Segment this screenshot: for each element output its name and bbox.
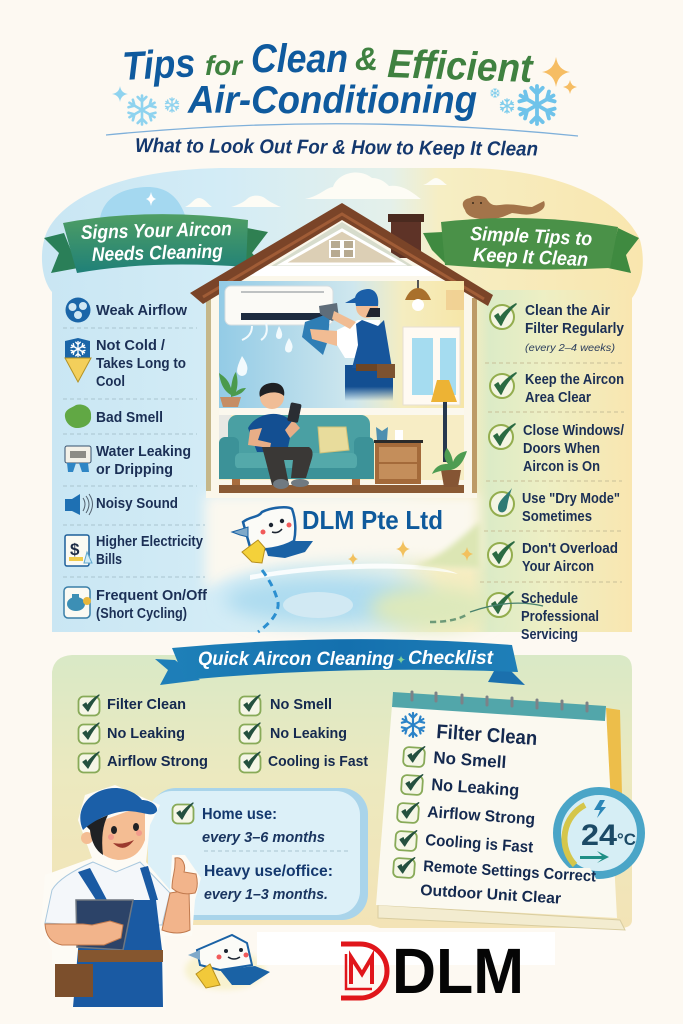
logo: DLM [341,935,524,1007]
item: no smell: No Smell [270,696,332,713]
item: do not overload: Don't Overload [522,541,618,557]
overalls bib [352,320,392,368]
item: do not overload: Your Aircon [522,559,594,575]
item: not cold [65,338,186,390]
badge: 24 degrees [557,791,641,882]
side table [374,427,423,484]
ribbon: quick aircon cleaning checklist: Checklist [408,647,494,669]
item: frequent on off: Frequent On/Off [96,588,207,604]
ribbon: signs your aircon needs cleaning: Needs Cleaning [92,241,223,266]
item: filter clean: Filter Clean [107,696,186,713]
list: signs your aircon needs cleaning [63,298,207,622]
icon: leaking unit [65,446,91,472]
title: for [205,50,244,81]
title: Efficient [387,42,535,91]
sofa [219,415,374,485]
logo mark [341,944,387,998]
floor [219,485,464,493]
notebook checklist [376,692,641,930]
ribbon: signs your aircon needs cleaning [44,214,268,273]
company name: DLM Pte Ltd [302,505,443,535]
list: simple tips [470,303,624,643]
item: water leaking: or Dripping [96,462,173,478]
item: airflow strong [78,752,208,772]
notebook text [420,721,596,908]
right arm [162,890,190,933]
icon: snow cone [65,338,91,382]
item: keep the area clear: Area Clear [525,390,591,406]
item: schedule servicing: Schedule [521,591,578,607]
item: not cold: Takes Long to [96,356,186,372]
item: higher electricity bills: Higher Electricity [96,534,203,550]
callout: servicing frequency: Home use: [202,806,277,823]
item: filter clean [78,695,186,716]
item: noisy sound: Noisy Sound [96,496,178,512]
item: clean the air filter [490,303,624,354]
gable with attic window [250,222,440,276]
tablet [76,900,133,950]
callout: servicing frequency: every 1–3 months. [204,886,328,903]
item: close windows: Doors When [523,441,600,457]
item: bad smell: Bad Smell [96,410,163,426]
icon: water drop check [490,488,514,516]
decorative snowflakes and sparkles beside title [112,57,577,124]
white outline [41,785,201,1010]
title: & [355,41,378,77]
icon: green smell cloud [65,405,91,428]
item: keep the area clear [490,372,624,406]
notebook text: Airflow Strong [427,804,536,829]
lower room wall [219,415,464,480]
notebook text: Cooling is Fast [425,832,534,857]
item: do not overload [488,541,618,575]
divider lines [63,328,205,577]
window [403,327,460,405]
panel: signs and tips background [42,168,643,632]
icon: check mark [172,803,194,824]
item: keep the area clear: Keep the Aircon [525,372,624,388]
left forearm and hand [45,921,123,945]
water drops [237,323,293,376]
title: Clean [251,37,348,81]
tool bag [55,964,93,997]
ribbon: simple tips to keep it clean: Simple Tips to [470,223,593,250]
item: close windows: Close Windows/ [523,423,624,439]
floor plant bottom [432,448,467,487]
item: weak airflow: Weak Airflow [96,303,188,319]
ribbon: simple tips to keep it clean [423,218,639,273]
floor plant top [219,372,246,407]
decorative sparkles [348,540,473,565]
illustration: house with technician and resident [190,203,493,498]
pendant lamp [405,280,464,311]
icon: timer [64,587,91,618]
item: dry mode: Use "Dry Mode" [522,491,620,507]
callout: servicing frequency: every 3–6 months [202,829,325,846]
clouds [185,172,447,207]
callout: servicing frequency [148,788,368,920]
belt [78,950,163,962]
item: cooling is fast: Cooling is Fast [268,753,368,770]
notebook back cover [600,707,622,800]
item: noisy sound [65,494,178,515]
icon: check mark [490,373,516,398]
white logo backing [257,932,555,965]
cap [80,788,157,830]
house base [206,493,477,498]
band between floors [219,408,464,415]
item: water leaking [65,444,191,478]
straps [78,866,158,900]
item: schedule servicing [470,591,599,643]
icon: speaker [65,494,92,515]
item: dry mode [490,488,620,525]
filter [302,313,330,355]
overalls [73,900,163,1007]
illustration: technician giving thumbs up [41,785,201,1010]
item: no smell [240,695,332,716]
item: cooling is fast [240,752,368,772]
item: airflow strong: Airflow Strong [107,753,208,770]
item: clean the air filter: Clean the Air [525,303,610,319]
ribbon: signs your aircon needs cleaning: Signs Your Aircon [81,218,232,244]
paper [376,693,617,918]
panel: quick checklist background [52,655,632,928]
notebook text: Remote Settings Correct [423,858,596,886]
icon: fan [66,298,90,322]
logo wordmark: DLM [392,935,524,1007]
head [90,805,145,860]
icon: bill: $ [70,540,80,559]
item: higher electricity bills [65,534,203,568]
icon: check mark [487,592,513,617]
roof [190,203,493,306]
item: no leaking second [240,723,347,744]
mascot and company name [232,505,473,565]
item: close windows [489,423,624,475]
badge: 24 degrees: °C [617,830,636,849]
header band [392,692,606,721]
upper room wall [219,281,464,408]
item: bad smell [65,405,163,428]
ribbon: quick aircon cleaning checklist: ✦ [396,653,406,667]
icon: snowflake [401,713,425,737]
item: not cold: Not Cold / [96,338,165,354]
item: close windows: Aircon is On [523,459,600,475]
item: dry mode: Sometimes [522,509,592,525]
title [121,37,535,122]
badge: 24 degrees: 24 [581,819,617,852]
resident on sofa with phone [248,383,313,489]
shirt [337,320,380,358]
checklist: two columns [78,695,368,772]
title: Air-Conditioning [187,79,477,122]
item: higher electricity bills: Bills [96,552,122,568]
icon: mascot [232,507,313,563]
callout: servicing frequency: Heavy use/office: [204,863,333,880]
ribbon: quick aircon cleaning checklist: Quick Aircon Cleaning [198,648,394,670]
item: weak airflow [66,298,188,322]
subtitle: What to Look Out For & How to Keep It Clean [135,135,538,161]
item: frequent on off [64,587,207,622]
check boxes [393,745,425,878]
item: no leaking second: No Leaking [270,725,347,742]
spiral rings [412,692,587,711]
shirt [45,862,170,925]
arms [310,329,337,346]
head and cap [356,296,378,318]
title: Tips [121,41,196,89]
item: not cold: Cool [96,374,125,390]
legs [345,365,393,401]
ribbon: quick aircon cleaning checklist [155,639,525,685]
floor lamp [431,380,457,462]
icon: small mascot with cloth [185,935,270,990]
thumbs up hand [172,858,197,894]
item: frequent on off: (Short Cycling) [96,606,187,622]
notebook text: No Smell [433,748,507,772]
item: no leaking: No Leaking [107,725,185,742]
technician cleaning filter [302,289,395,401]
notebook text: No Leaking [431,775,520,800]
item: no leaking [78,723,185,744]
item: schedule servicing: Servicing [521,627,578,643]
item: schedule servicing: Professional [521,609,599,625]
divider lines [480,363,624,582]
ribbon: simple tips to keep it clean: Keep It Clean [473,244,589,271]
notebook text: Outdoor Unit Clear [420,882,562,908]
icon: squirrel on the right ribbon [463,196,545,219]
icon: check mark [489,424,515,449]
notebook text: Filter Clean [436,721,538,750]
icon: check mark [488,542,514,567]
title divider arc [106,124,578,136]
tool belt [356,364,394,371]
item: clean the air filter: (every 2–4 weeks) [525,342,615,354]
air conditioner unit [225,286,333,325]
item: clean the air filter: Filter Regularly [525,321,624,337]
house walls [206,215,477,498]
chimney [388,214,424,258]
item: water leaking: Water Leaking [96,444,191,460]
icon: check mark [490,304,516,329]
